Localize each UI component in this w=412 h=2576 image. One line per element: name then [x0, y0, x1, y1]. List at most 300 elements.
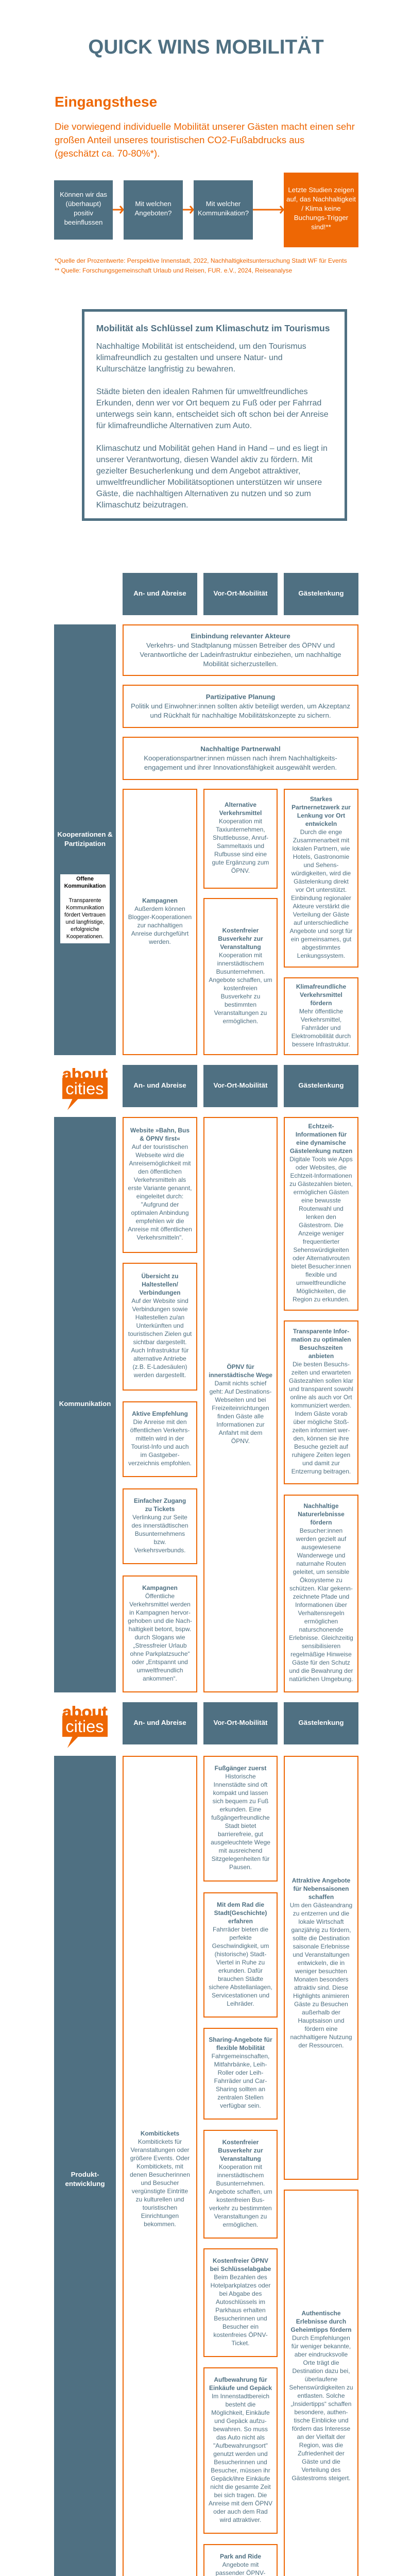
card: Attraktive Angebote für Nebensaisonen: attraktiv sind. Diese — [294, 1984, 348, 1991]
card: Starkes Partnernetzwerk: abgestimmtes — [302, 944, 340, 951]
card: Alternative Verkehrsmittel: Verkehrsmittel — [219, 809, 262, 817]
card: Attraktive Angebote für Nebensaisonen: der Ressourcen. — [298, 2041, 344, 2048]
card: Fußgänger zuerst: Historische — [225, 1773, 256, 1780]
flow box 1: Können wir das — [60, 191, 107, 198]
card: ÖPNV für innerstädtische Wege: Damit nichts schief — [215, 1380, 266, 1387]
card: Authentische Erlebnisse: Verteilung des — [301, 2466, 341, 2473]
card: Mit dem Rad: Viertel in Ruhe zu — [216, 1959, 265, 1966]
card: Authentische Erlebnisse: Orte trägt die — [303, 2359, 339, 2366]
card: Kostenfreier ÖPNV: bei Abgabe des — [219, 2290, 262, 2297]
card: Sharing-Angebote: verfügbar sein. — [220, 2102, 261, 2109]
card: Kombitickets: größere Events. Oder — [130, 2155, 190, 2162]
card: Kostenfreier ÖPNV: Kostenfreier ÖPNV — [213, 2257, 268, 2264]
card: Nachhaltige Partnerwahl: engagement und ihrer Innovationsfähigkeit ausgewählt werden. — [144, 764, 337, 771]
card: Starkes Partnernetzwerk: ein gemeinsames, gut — [291, 936, 351, 943]
intro text block: (geschätzt ca. 70-80%*). — [55, 148, 160, 159]
card: Kampagnen: „Stressfreier Urlaub — [133, 1641, 186, 1649]
card: Website Bahn, Bus und ÖPNV first: Anreisemöglichkeit mit — [129, 1160, 191, 1167]
card: Kombitickets: Kombitickets für — [138, 2138, 182, 2145]
header: An- und Abreise — [123, 1065, 197, 1107]
card: Nachhaltige Naturerlebnisse: zeichnete Pfade und — [293, 1593, 349, 1600]
card: Echtzeit-Informationen: Region zu erkunden. — [293, 1296, 350, 1303]
card: Klimafreundliche Verkehrsmittel: Elektromobilität durch — [291, 1032, 351, 1040]
callout: Offene Kommunikation: erfolgreiche — [71, 926, 99, 933]
card: Kostenfreier Busverkehr: ermöglichen. — [223, 1017, 258, 1024]
card: Übersicht zu Haltestellen: touristischen Zielen gut — [128, 1330, 192, 1337]
card: Aktive Empfehlung: Aktive Empfehlung — [132, 1410, 188, 1417]
card: Kombitickets: touristischen — [143, 2204, 177, 2211]
card: Einfacher Zugang zu Tickets — [123, 1488, 197, 1564]
card: Attraktive Angebote für Nebensaisonen: nachhaltigere Nutzung — [290, 2033, 352, 2040]
card: Nachhaltige Naturerlebnisse: ermöglichen — [304, 1618, 338, 1625]
card: Website Bahn, Bus und ÖPNV first: Anreise mit öffentlichen — [128, 1226, 192, 1233]
callout: Offene Kommunikation: Offene — [76, 876, 94, 882]
panel body text: umweltfreundlicher Mobilitätsoptionen unterstützen wir unsere — [96, 478, 322, 486]
card: Echtzeit-Informationen: Routenwahl und — [299, 1205, 344, 1212]
card: Nachhaltige Naturerlebnisse: fördern — [310, 1519, 332, 1526]
card: Authentische Erlebnisse: fördern das Interesse — [292, 2425, 350, 2432]
card: Aufbewahrung: Gepäck/ihre Einkäufe — [211, 2475, 270, 2482]
card: Aufbewahrung: Einkäufe und Gepäck — [209, 2384, 272, 2392]
card: Transparente Information: und transparent sowohl — [289, 1385, 353, 1393]
card: Starkes Partnernetzwerk: und Sehens- — [303, 861, 339, 869]
arrow 1 — [113, 206, 124, 214]
card: Kostenfreier Busverkehr: Veranstaltungen zu — [214, 1009, 267, 1016]
card: Alternative Verkehrsmittel: gute Ergänzung zum — [212, 859, 269, 866]
card: Kombitickets: Kombitickets, mit — [136, 2163, 183, 2170]
card: Klimafreundliche Verkehrsmittel: Klimafreundliche — [296, 983, 346, 990]
card: Alternative Verkehrsmittel: Shuttlebusse, Anruf- — [213, 834, 268, 841]
card: Einbindung relevanter Akteure — [123, 624, 358, 676]
sidebar label: entwicklung — [65, 2180, 105, 2188]
panel body text: Nachhaltige Mobilität ist entscheidend, um den Tourismus — [96, 342, 306, 350]
card: Attraktive Angebote für Nebensaisonen: zu entzerren und die — [293, 1909, 349, 1917]
card: Fußgänger zuerst: Fußgänger zuerst — [215, 1765, 266, 1772]
card: Kombitickets: denen Besucherinnen — [130, 2171, 190, 2178]
card: Einfacher Zugang zu Tickets: Verkehrsverbunds. — [134, 1547, 186, 1554]
panel body text: Kulturschätze langfristig zu bewahren. — [96, 365, 235, 373]
card: Website Bahn, Bus und ÖPNV first: Verkehrsmitteln". — [136, 1234, 183, 1241]
card: Kampagnen: ankommen“. — [143, 1674, 177, 1682]
card: Echtzeit-Informationen: Gästelenkung nutzen — [290, 1147, 352, 1155]
card: Website Bahn, Bus und ÖPNV first — [123, 1117, 197, 1253]
intro text block — [55, 121, 355, 159]
sidebar label: Partizipation — [64, 840, 106, 848]
card: Kostenfreier Busverkehr: Busunternehmen. — [216, 2179, 265, 2187]
card: Kostenfreier Busverkehr: Busverkehr zur — [218, 935, 263, 942]
card: Website Bahn, Bus und ÖPNV first: Auf der touristischen — [132, 1143, 188, 1150]
flow box 4: highlight: auf, das Nachhaltigkeit — [286, 195, 356, 203]
card: Einbindung relevanter Akteure: Mobilität sicherzustellen. — [203, 660, 278, 668]
section: Produktentwicklung — [54, 1756, 358, 2576]
card: Mit dem Rad: Servicestationen und — [212, 1992, 269, 1999]
panel body text — [96, 342, 329, 509]
card: Kostenfreier Busverkehr: Kostenfreier — [222, 2138, 259, 2145]
card: Nachhaltige Naturerlebnisse: natürlichen Umgebung. — [289, 1675, 353, 1683]
flow box 3 — [194, 180, 253, 240]
card: Alternative Verkehrsmittel: Kooperation mit — [219, 818, 262, 825]
card: Kampagnen: durch Slogans wie — [134, 1633, 185, 1640]
card: Aufbewahrung: bei sich tragen. Die — [214, 2492, 267, 2499]
card: Kostenfreier ÖPNV: Besucherinnen und — [214, 2314, 267, 2321]
panel: Mobilität als Schlüssel — [82, 309, 347, 521]
card: Starkes Partnernetzwerk — [284, 789, 358, 968]
card: Authentische Erlebnisse: für weniger bekannte, — [291, 2343, 351, 2350]
card: Übersicht zu Haltestellen — [123, 1263, 197, 1391]
card: Echtzeit-Informationen: eine dynamische — [296, 1139, 346, 1146]
card: Kostenfreier Busverkehr: ermöglichen. — [223, 2221, 258, 2228]
card: Authentische Erlebnisse: besondere, authen- — [294, 2409, 348, 2416]
header: An- und Abreise — [123, 1702, 197, 1744]
intro text block: Die vorwiegend individuelle Mobilität unserer Gästen macht einen sehr — [55, 121, 355, 132]
card: Starkes Partnernetzwerk: auf unterschiedliche — [294, 919, 349, 926]
card: Echtzeit-Informationen: oder Websites, die — [296, 1164, 347, 1171]
card: ÖPNV für innerstädtische Wege — [203, 1117, 278, 1692]
card: Fußgänger zuerst: kompakt und lassen — [213, 1789, 268, 1797]
card: Transparente Information: anbieten — [308, 1352, 334, 1360]
card: Aufbewahrung: oder auch dem Rad — [213, 2508, 268, 2515]
card: Nachhaltige Naturerlebnisse: Besucher:innen — [300, 1527, 342, 1534]
card: Starkes Partnernetzwerk: entwickeln — [305, 820, 337, 827]
card: Kampagnen — [123, 789, 197, 1055]
card: Klimafreundliche Verkehrsmittel: Verkehrsmittel — [300, 991, 342, 998]
card: Kostenfreier Busverkehr: innerstädtischem — [217, 2171, 264, 2178]
card: Aktive Empfehlung: Tourist-Info und auch — [131, 1443, 189, 1450]
card: Kostenfreier Busverkehr: verkehr zu bestimmten — [209, 2204, 272, 2211]
card: Einfacher Zugang zu Tickets: des innerstädtischen — [131, 1522, 188, 1529]
card: Starkes Partnernetzwerk: Starkes — [310, 795, 332, 803]
card: Sharing-Angebote: Fahrräder und Car- — [214, 2077, 267, 2084]
card: Kampagnen: Anreise durchgeführt — [131, 929, 188, 937]
panel body text: Erkunden, denn wer vor Ort bequem zu Fuß oder per Fahrrad — [96, 399, 321, 407]
card: Echtzeit-Informationen: Informationen für — [296, 1131, 347, 1138]
card: Kampagnen: Blogger-Kooperationen — [128, 913, 192, 920]
card: Kostenfreier ÖPNV: bei Schlüsselabgabe — [210, 2265, 271, 2272]
card: ÖPNV für innerstädtische Wege: Anfahrt mit dem — [219, 1429, 262, 1436]
card: Kostenfreier Busverkehr: Busunternehmen. — [216, 968, 265, 975]
panel body text: Klimaschutz beizutragen. — [96, 501, 188, 509]
card: Attraktive Angebote für Nebensaisonen: ganzjährig zu fördern, — [291, 1926, 351, 1933]
card: Authentische Erlebnisse: Gästestroms steigert. — [291, 2475, 351, 2482]
logo: about cities 2: cities — [65, 1717, 104, 1736]
card: Kombitickets: Einrichtungen — [141, 2212, 179, 2219]
card: Einfacher Zugang zu Tickets: zu Tickets — [145, 1505, 175, 1513]
callout: Offene Kommunikation: Transparente — [69, 897, 101, 904]
card: Kostenfreier Busverkehr: Veranstaltung — [220, 2155, 261, 2162]
card: Nachhaltige Naturerlebnisse: ausgewiesene — [301, 1544, 341, 1551]
card: Fußgänger zuerst: barrierefreie, gut — [218, 1831, 263, 1838]
card: Fußgänger zuerst: Innenstädte sind oft — [214, 1781, 267, 1788]
callout: Offene Kommunikation: Kommunikation — [64, 883, 106, 889]
card: Mit dem Rad — [203, 1892, 278, 2018]
card: Sharing-Angebote: Roller oder Leih- — [218, 2069, 263, 2076]
card: Starkes Partnernetzwerk: Hotels, Gastronomie — [293, 853, 349, 860]
card: Echtzeit-Informationen: frequentierter — [303, 1238, 339, 1245]
card: Nachhaltige Naturerlebnisse: Gäste für den Schutz — [292, 1659, 350, 1666]
flow box 2: Angeboten? — [135, 209, 171, 217]
card: Sharing-Angebote: flexible Mobilität — [216, 2044, 265, 2052]
card: Aufbewahrung: das Auto nicht als — [216, 2434, 265, 2441]
card: Aufbewahrung: besteht die — [226, 2401, 255, 2408]
card: Kampagnen: Kampagnen — [142, 1584, 178, 1591]
card: Kostenfreier Busverkehr: Kostenfreier — [222, 926, 259, 934]
card: Übersicht zu Haltestellen: Auf der Website sind — [131, 1297, 188, 1304]
card: Sharing-Angebote: Fahrgemeinschaften, — [212, 2053, 269, 2060]
card: Klimafreundliche Verkehrsmittel: Verkehrsmittel, — [301, 1016, 341, 1023]
card: ÖPNV für innerstädtische Wege: Informationen zur — [216, 1421, 265, 1428]
card: Transparente Information: Indem Gäste vorab — [295, 1410, 348, 1417]
card: Transparente Information: zeiten und erwarteten — [291, 1369, 351, 1376]
callout: Offene Kommunikation: Kooperationen. — [66, 934, 104, 940]
card: Sharing-Angebote: Mitfahrbänke, Leih- — [214, 2061, 267, 2068]
card: Transparente Information: Transparente Infor- — [293, 1328, 349, 1335]
card: Echtzeit-Informationen: Digitale Tools wie Apps — [289, 1156, 353, 1163]
card: Aufbewahrung: und Gepäck aufzu- — [214, 2417, 267, 2425]
flow box 4: highlight: sind!** — [311, 223, 331, 231]
card: Kostenfreier Busverkehr: kostenfreien — [224, 984, 258, 991]
sidebar label: Produkt- — [71, 2171, 99, 2178]
card: Aufbewahrung: Möglichkeit, Einkäufe — [211, 2409, 270, 2416]
card: Kampagnen: werden. — [149, 938, 171, 945]
card: Mit dem Rad: perfekte — [229, 1934, 252, 1941]
card: Attraktive Angebote für Nebensaisonen: Gäste zu Besuchen — [294, 2000, 348, 2007]
card: Attraktive Angebote für Nebensaisonen: und Veranstaltungen — [293, 1951, 350, 1958]
card: Aufbewahrung: Anreise mit dem ÖPNV — [209, 2500, 272, 2507]
card: Mit dem Rad: Leihräder. — [227, 2000, 254, 2007]
logo: about cities 1 — [62, 1068, 108, 1110]
card: Übersicht zu Haltestellen: Verbindungen — [139, 1289, 180, 1296]
card: Mit dem Rad: Geschwindigkeit, um — [212, 1942, 269, 1950]
card: Aufbewahrung: bewahren. So muss — [213, 2426, 268, 2433]
card: Starkes Partnernetzwerk: Gästelenkung direkt — [294, 878, 349, 885]
card: Fußgänger zuerst — [203, 1756, 278, 1882]
card: Transparente Information: ruhigere Zeiten legen — [292, 1451, 350, 1459]
card: Aufbewahrung: Besucher, müssen ihr — [211, 2467, 270, 2474]
card: Echtzeit-Informationen: Sehenswürdigkeiten — [293, 1246, 349, 1253]
sidebar label — [57, 831, 113, 848]
card: Nachhaltige Naturerlebnisse: naturnahe Routen — [296, 1560, 346, 1567]
card: Authentische Erlebnisse: tische Einblicke und — [294, 2417, 349, 2424]
card: Kombitickets: bekommen. — [144, 2221, 176, 2228]
card: Starkes Partnernetzwerk: lokalen Partnern, wie — [292, 845, 350, 852]
panel body text: Klimaschutz und Mobilität gehen Hand in Hand – und es liegt in — [96, 444, 328, 452]
flow box 1 — [54, 180, 113, 240]
flow box 4: highlight: / Klima keine — [301, 205, 341, 212]
card: Kostenfreier Busverkehr: Busverkehr zur — [218, 2146, 263, 2154]
card: Aktive Empfehlung — [123, 1401, 197, 1477]
column headers row 3 — [123, 1702, 358, 1744]
card: Transparente Information: und damit zur — [302, 1460, 340, 1467]
card: Kostenfreier Busverkehr: innerstädtischem — [217, 959, 264, 967]
card: Alternative Verkehrsmittel: Taxiunternehmen, — [216, 826, 265, 833]
card: Attraktive Angebote für Nebensaisonen: für Nebensaisonen — [293, 1885, 349, 1892]
card: Nachhaltige Naturerlebnisse: sensibilisieren — [302, 1642, 340, 1650]
card: Kampagnen: in Kampagnen hervor- — [129, 1608, 191, 1616]
card: Übersicht zu Haltestellen: sichtbar dargestellt. — [133, 1338, 187, 1346]
card: Übersicht zu Haltestellen: alternative Antriebe — [133, 1355, 186, 1362]
card: Starkes Partnernetzwerk: Partnernetzwerk zur — [291, 804, 351, 811]
card: Übersicht zu Haltestellen: Haltestellen zu/an — [135, 1314, 184, 1321]
header: An- und Abreise — [123, 573, 197, 615]
panel body text: unterwegs sein kann, entscheidet sich oft schon bei der Anreise — [96, 410, 329, 418]
header: An- und Abreise: An- und Abreise — [133, 1719, 186, 1726]
card: Mit dem Rad: Stadt(Geschichte) — [214, 1909, 267, 1917]
card: Authentische Erlebnisse: Region, was die — [299, 2442, 343, 2449]
flow box 1: positiv — [74, 209, 93, 217]
card: Echtzeit-Informationen: oder Alternativrouten — [293, 1255, 350, 1262]
callout: Offene Kommunikation: fördert Vertrauen — [64, 912, 106, 918]
header: An- und Abreise: An- und Abreise — [133, 1081, 186, 1089]
card: Echtzeit-Informationen: bietet Besucher:innen — [291, 1263, 351, 1270]
card: Mit dem Rad: sichere Abstellanlagen, — [209, 1984, 272, 1991]
flow box 1: (überhaupt) — [66, 200, 101, 208]
card: Kostenfreier ÖPNV: Autoschlüssels im — [216, 2298, 265, 2305]
header: Gästelenkung: Gästelenkung — [298, 1719, 344, 1726]
card: Aufbewahrung: wird attraktiver. — [220, 2516, 261, 2523]
card: Attraktive Angebote für Nebensaisonen: Monaten besonders — [294, 1975, 349, 1982]
panel body text: unserer Verantwortung, diesen Wandel aktiv zu fördern. Mit — [96, 455, 313, 464]
card: Fußgänger zuerst: fußgängerfreundliche — [211, 1814, 270, 1821]
card: Attraktive Angebote für Nebensaisonen: entwickeln, die in — [298, 1959, 345, 1966]
card: Nachhaltige Naturerlebnisse: Informationen über — [295, 1601, 347, 1608]
card: Fußgänger zuerst: erkunden. Eine — [220, 1806, 261, 1813]
sidebar label: Kommunikation — [59, 1400, 111, 1408]
card: Nachhaltige Naturerlebnisse: Ökosysteme zu — [300, 1577, 342, 1584]
card: Kampagnen: Öffentliche — [145, 1592, 175, 1599]
card: Übersicht zu Haltestellen: werden dargestellt. — [134, 1371, 186, 1379]
card: Starkes Partnernetzwerk: würdigkeiten, wird die — [291, 870, 351, 877]
card: Sharing-Angebote: zentralen Stellen — [217, 2094, 264, 2101]
card: Einbindung relevanter Akteure: Verkehrs- und Stadtplanung müssen Betreiber des ÖPNV und — [146, 641, 335, 649]
card: Transparente Information: zeiten informiert wer- — [292, 1427, 350, 1434]
card: Fußgänger zuerst: Sitzgelegenheiten für — [212, 1855, 269, 1862]
card: Attraktive Angebote für Nebensaisonen: fördern eine — [304, 2025, 338, 2032]
card: Echtzeit-Informationen: umweltfreundliche — [296, 1279, 346, 1286]
card: Nachhaltige Naturerlebnisse: schützen. Klar gekenn- — [289, 1585, 353, 1592]
card: Starkes Partnernetzwerk: Lenkung vor Ort — [297, 812, 345, 819]
card: Übersicht zu Haltestellen: Auch Infrastruktur für — [131, 1347, 189, 1354]
section: Kommunikation — [54, 1117, 358, 1692]
header: Gästelenkung — [284, 573, 358, 615]
card: Mit dem Rad: Mit dem Rad die — [217, 1901, 264, 1908]
card: Authentische Erlebnisse: an der Vielfalt der — [297, 2433, 345, 2441]
card: Mit dem Rad: Fahrräder bieten die — [213, 1926, 268, 1933]
card: Kostenfreier Busverkehr: Angebote schaffen, um — [209, 2188, 272, 2195]
flow box 3: Mit welcher — [206, 200, 241, 208]
card: Starkes Partnernetzwerk: Zusammenarbeit mit — [293, 837, 349, 844]
card: Kostenfreier Busverkehr: Kooperation mit — [219, 951, 262, 958]
card: Transparente Information: Gästezahlen sollen klar — [289, 1377, 353, 1384]
card: Transparente Information: Besuchszeiten — [299, 1344, 343, 1351]
card: Kampagnen: Außerdem können — [134, 905, 185, 912]
card: Authentische Erlebnisse: Sehenswürdigkeiten zu — [289, 2384, 353, 2391]
card: Kampagnen: gehoben und die Nach- — [128, 1617, 192, 1624]
card: ÖPNV für innerstädtische Wege: Freizeiteinrichtungen — [212, 1404, 269, 1412]
card: Kostenfreier Busverkehr: bestimmten — [225, 1001, 256, 1008]
card: Authentische Erlebnisse: überlaufene — [305, 2376, 337, 2383]
card: Authentische Erlebnisse — [284, 2190, 358, 2576]
flow box 2: Mit welchen — [135, 200, 171, 208]
card: Transparente Information: Die besten Besuchs- — [293, 1361, 350, 1368]
card: Transparente Information: kommuniziert werden. — [291, 1402, 351, 1409]
header: Gästelenkung — [284, 1702, 358, 1744]
panel body text: Städte bieten den idealen Rahmen für umweltfreundliches — [96, 387, 308, 396]
card: Echtzeit-Informationen: Möglichkeiten, die — [296, 1287, 346, 1295]
card: Aktive Empfehlung: im Gastgeber- — [140, 1451, 179, 1458]
card: Übersicht zu Haltestellen: Unterkünften und — [136, 1322, 184, 1329]
title: QUICK WINS MOBILITÄT — [88, 36, 324, 58]
card: Mit dem Rad: erkunden. Dafür — [218, 1967, 263, 1974]
sidebar label — [65, 2171, 105, 2188]
card: Website Bahn, Bus und ÖPNV first: erste Variante genannt, — [128, 1184, 192, 1192]
card: Übersicht zu Haltestellen: Verbindungen sowie — [132, 1306, 188, 1313]
logo: about cities 1: cities — [65, 1079, 104, 1098]
intro text block: großen Anteil unseres touristischen CO2-Fußabdrucks aus — [55, 134, 304, 145]
card: Kostenfreier ÖPNV: Beim Bezahlen des — [214, 2273, 267, 2280]
column headers row 2 — [123, 1065, 358, 1107]
card: Attraktive Angebote für Nebensaisonen: Attraktive Angebote — [292, 1876, 350, 1884]
card: Kampagnen: zur nachhaltigen — [137, 921, 183, 928]
card: Alternative Verkehrsmittel: Rufbusse sind eine — [214, 851, 267, 858]
card: Kostenfreier Busverkehr — [203, 2130, 278, 2239]
card: Kostenfreier Busverkehr: kostenfreien Bus- — [216, 2196, 265, 2203]
card: Park and Ride: Park and Ride — [220, 2553, 261, 2560]
card: Transparente Information: über mögliche Stoß- — [293, 1418, 349, 1426]
card: Park and Ride — [203, 2544, 278, 2576]
card: Authentische Erlebnisse: Geheimtipps fördern — [290, 2326, 351, 2333]
card: Kostenfreier ÖPNV: kostenfreies ÖPNV- — [213, 2331, 268, 2338]
callout: Offene Kommunikation: und langfristige, — [65, 919, 105, 925]
card: Nachhaltige Naturerlebnisse: und die Bewahrung der — [289, 1667, 353, 1674]
card: Transparente Information: Besuche gezielt auf — [294, 1443, 348, 1450]
panel heading: Mobilität als Schlüssel zum Klimaschutz im Tourismus — [96, 323, 330, 333]
card: Mit dem Rad: (historische) Stadt- — [215, 1951, 266, 1958]
header: Gästelenkung — [284, 1065, 358, 1107]
callout: Offene Kommunikation — [60, 874, 110, 943]
header: Vor-Ort-Mobilität — [203, 573, 278, 615]
card: Kampagnen: umweltfreundlich — [136, 1666, 183, 1673]
card: Transparente Information: Entzerrung beitragen. — [291, 1468, 351, 1475]
card: ÖPNV für innerstädtische Wege: ÖPNV. — [231, 1437, 250, 1445]
card: Kostenfreier Busverkehr: Angebote schaffen, um — [209, 976, 272, 983]
card: Einfacher Zugang zu Tickets: Verlinkung zur Seite — [132, 1514, 187, 1521]
card: Transparente Information: online als auch vor Ort — [290, 1394, 352, 1401]
sidebar label: Kooperationen & — [57, 831, 113, 838]
card: Nachhaltige Naturerlebnisse: Nachhaltige — [303, 1502, 339, 1510]
flow box 4: highlight: Buchungs-Trigger — [294, 214, 348, 222]
card: Attraktive Angebote für Nebensaisonen: weniger besuchten — [295, 1967, 347, 1974]
card: Partizipative Planung: Politik und Einwohner:innen sollten aktiv beteiligt werden, um Akzeptanz — [131, 702, 350, 710]
flow box 1: beeinflussen — [64, 218, 102, 226]
card: Nachhaltige Partnerwahl: Nachhaltige Partnerwahl — [200, 745, 281, 753]
card: Attraktive Angebote für Nebensaisonen: Hauptsaison und — [298, 2016, 345, 2024]
card: Kombitickets: Kombitickets — [141, 2130, 179, 2137]
card: Starkes Partnernetzwerk: Akteure verstärkt die — [293, 903, 350, 910]
card: Fußgänger zuerst: sich bequem zu Fuß — [213, 1798, 268, 1805]
column headers row 1 — [123, 573, 358, 615]
callout: Offene Kommunikation: Kommunikation — [66, 905, 104, 911]
card: Starkes Partnernetzwerk: Angebote und sorgt für — [289, 927, 353, 935]
card: Authentische Erlebnisse: Authentische — [301, 2310, 341, 2317]
card: Attraktive Angebote für Nebensaisonen — [284, 1756, 358, 2180]
card: Kombitickets — [123, 1756, 197, 2576]
header: An- und Abreise: An- und Abreise — [133, 589, 186, 597]
header: Gästelenkung: Gästelenkung — [298, 1081, 344, 1089]
card: Authentische Erlebnisse: Zufriedenheit der — [298, 2450, 345, 2457]
panel body text: klimafreundlich zu gestalten und unsere Natur- und — [96, 353, 283, 362]
card: Transparente Information — [284, 1320, 358, 1484]
card: Kampagnen: ohne Parkplatzsuche“ — [130, 1650, 190, 1657]
